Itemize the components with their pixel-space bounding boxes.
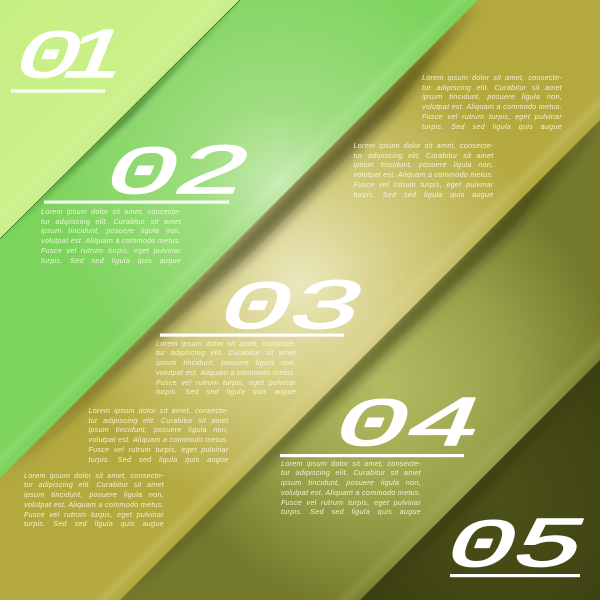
text block: bottom left: Lorem ipsum dolor sit amet, consecte-	[24, 471, 164, 480]
text block: under 03	[156, 339, 296, 396]
panel: band 04	[120, 120, 600, 600]
text block: bottom left: turpis. Sed sed ligula quis augue	[24, 519, 164, 528]
text block: under 02	[41, 207, 181, 265]
text block: upper middle: turpis. Sed sed ligula quis augue	[354, 190, 494, 199]
text block: top right: Lorem ipsum dolor sit amet, consecte-	[422, 73, 562, 82]
text block: lower middle: Fusce vel rutrum turpis, eget pulvinar	[88, 445, 228, 454]
text block: under 04: Lorem ipsum dolor sit amet, consecte-	[281, 459, 421, 468]
text block: lower middle: ipsum tincidunt, posuere ligula non,	[88, 425, 228, 434]
divider bar 01	[11, 89, 105, 93]
number 03: 03	[205, 267, 377, 349]
text block: bottom left: Fusce vel rutrum turpis, eget pulvinar	[24, 510, 164, 519]
text block: under 04	[281, 459, 421, 516]
panel: band 01	[0, 0, 240, 240]
divider bar 03	[160, 334, 344, 337]
text block: upper middle: tur adipiscing elit. Curabitur sit amet	[354, 151, 494, 160]
text block: top right: turpis. Sed sed ligula quis augue	[422, 122, 562, 131]
text block: bottom left	[24, 471, 164, 528]
text block: under 03: Fusce vel rutrum turpis, eget pulvinar	[156, 378, 296, 387]
text block: under 03: turpis. Sed sed ligula quis augue	[156, 387, 296, 396]
text block: under 04: volutpat est. Aliquam a commodo metus.	[281, 488, 421, 497]
text block: under 04: Fusce vel rutrum turpis, eget pulvinar	[281, 498, 421, 507]
number 01: 01	[1, 15, 142, 98]
text block: top right	[422, 73, 562, 131]
text block: bottom left: ipsum tincidunt, posuere ligula non,	[24, 490, 164, 499]
text block: under 04: turpis. Sed sed ligula quis augue	[281, 507, 421, 516]
text block: under 02: ipsum tincidunt, posuere ligula non,	[41, 226, 181, 235]
divider bar 05	[450, 574, 580, 577]
text block: under 02: turpis. Sed sed ligula quis augue	[41, 256, 181, 265]
text block: upper middle: Lorem ipsum dolor sit amet, consecte-	[354, 141, 494, 150]
text block: under 02: Fusce vel rutrum turpis, eget pulvinar	[41, 246, 181, 255]
text block: under 03: ipsum tincidunt, posuere ligula non,	[156, 358, 296, 367]
text block: upper middle	[354, 141, 494, 199]
text block: under 03: Lorem ipsum dolor sit amet, consecte-	[156, 339, 296, 348]
text block: lower middle: volutpat est. Aliquam a commodo metus.	[88, 435, 228, 444]
text block: under 02: tur adipiscing elit. Curabitur sit amet	[41, 217, 181, 226]
number 02: 02	[91, 132, 263, 214]
number 05: 05	[431, 504, 598, 587]
text block: bottom left: volutpat est. Aliquam a commodo metus.	[24, 500, 164, 509]
text block: under 03: tur adipiscing elit. Curabitur sit amet	[156, 348, 296, 357]
text block: top right: Fusce vel rutrum turpis, eget pulvinar	[422, 112, 562, 121]
divider bar 02	[44, 200, 229, 204]
text block: under 02: Lorem ipsum dolor sit amet, consecte-	[41, 207, 181, 216]
text block: top right: volutpat est. Aliquam a commodo metus.	[422, 102, 562, 111]
panel: band 05	[360, 360, 600, 600]
text block: lower middle	[88, 406, 228, 464]
divider bar 04	[280, 454, 464, 457]
text block: top right: tur adipiscing elit. Curabitur sit amet	[422, 83, 562, 92]
text block: lower middle: tur adipiscing elit. Curabitur sit amet	[88, 416, 228, 425]
number 04: 04	[320, 383, 496, 466]
text block: top right: ipsum tincidunt, posuere ligula non,	[422, 92, 562, 101]
text block: upper middle: ipsum tincidunt, posuere ligula non,	[354, 160, 494, 169]
text block: under 04: tur adipiscing elit. Curabitur sit amet	[281, 468, 421, 477]
text block: upper middle: volutpat est. Aliquam a commodo metus.	[354, 170, 494, 179]
text block: under 02: volutpat est. Aliquam a commodo metus.	[41, 236, 181, 245]
panel: band 02	[0, 0, 478, 478]
text block: under 03: volutpat est. Aliquam a commodo metus.	[156, 368, 296, 377]
text block: lower middle: Lorem ipsum dolor sit amet, consecte-	[88, 406, 228, 415]
text block: upper middle: Fusce vel rutrum turpis, eget pulvinar	[354, 180, 494, 189]
text block: under 04: ipsum tincidunt, posuere ligula non,	[281, 478, 421, 487]
text block: bottom left: tur adipiscing elit. Curabitur sit amet	[24, 480, 164, 489]
text block: lower middle: turpis. Sed sed ligula quis augue	[88, 455, 228, 464]
